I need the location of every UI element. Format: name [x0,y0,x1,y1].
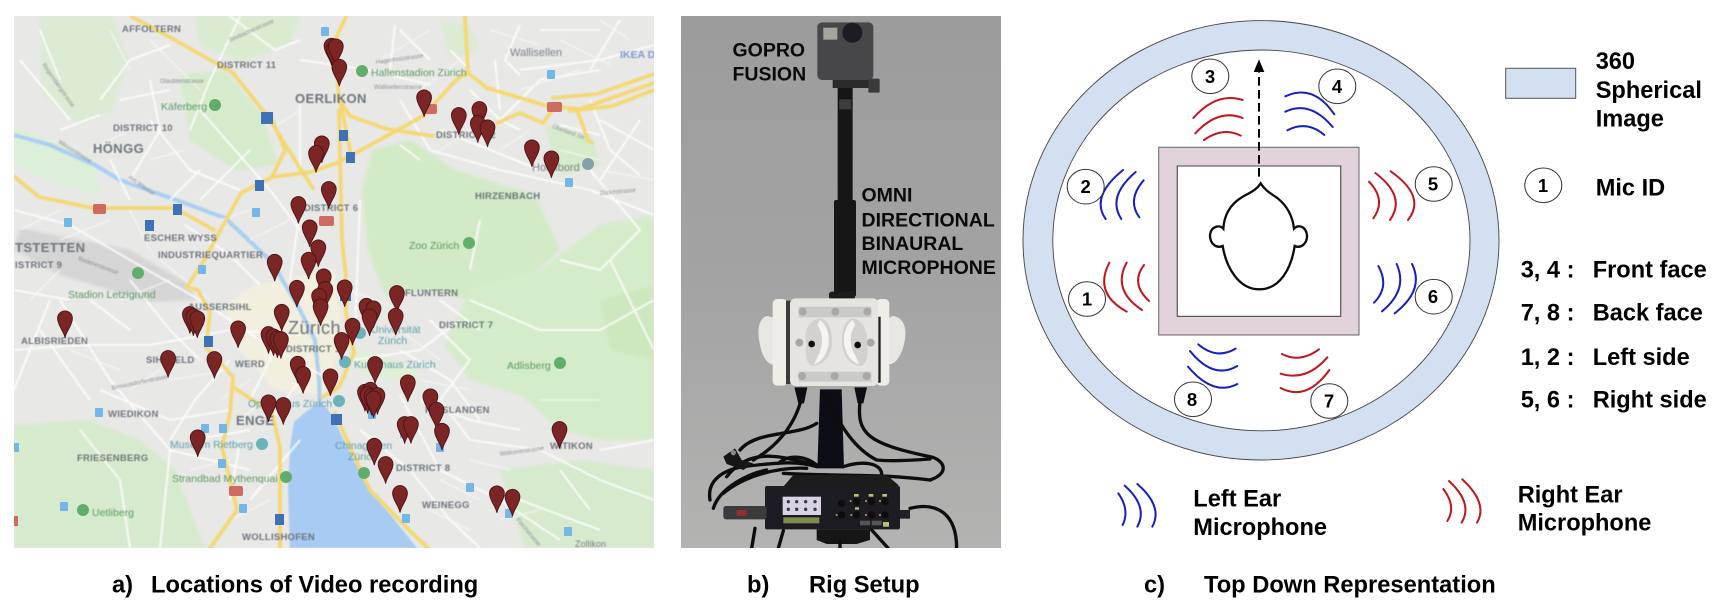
map place labels: Wallisellenstrasse [374,85,422,91]
legend: mic id: Mic ID [1596,176,1665,202]
map place labels: DISTRICT 11 [217,60,277,71]
panel: top down diagram [1023,21,1499,527]
map place labels: Seebacherstrasse [228,18,276,44]
map place labels: ALBISRIEDEN [21,336,88,347]
legend: mic id [1525,168,1665,203]
map place labels: Chinagarten [335,440,392,452]
legend: mic faces: Right side [1593,388,1707,414]
legend: mic faces: Left side [1593,345,1690,371]
legend: mic faces [1521,258,1707,414]
map place labels: ISTRICT 9 [15,260,62,271]
legend: left ear microphone: Microphone [1193,515,1327,541]
rig label: camera: FUSION [732,64,806,86]
legend: right ear microphone: Microphone [1518,511,1651,537]
mic id circles: 7 [1324,390,1334,412]
mic 8 left ear arcs [1188,344,1237,388]
mic arcs and arrow upper left [1101,59,1334,289]
caption b [747,572,920,598]
panel: map of video recording locations [14,16,692,549]
panel: rig photo [681,16,1001,548]
map place labels: Adlisberg [507,360,551,372]
map place labels: Zollikon [575,539,606,549]
mic 4 left ear arcs [1285,92,1334,135]
mic id circles [1067,59,1452,418]
legend: mic id: 1 [1538,175,1548,196]
caption b: b) [747,572,769,598]
map place labels: DISTRICT 12 [436,130,496,141]
legend: left ear microphone [1193,487,1327,541]
map place labels: Strandbad Mythenquai [172,473,278,485]
mic id circles: 8 [1187,389,1197,410]
rig label: microphone: BINAURAL [862,233,963,255]
legend: spherical image: 360 [1596,49,1635,75]
map place labels: Birmensdorferstrasse [111,374,169,392]
mic arcs lower left [1104,263,1329,527]
caption a: Locations of Video recording [151,572,478,598]
legend: mic faces: Back face [1593,301,1703,327]
rig label: microphone: MICROPHONE [862,257,996,279]
binaural microphone head [758,292,906,386]
map place labels: FRIESENBERG [77,453,148,464]
map place labels: FLUNTERN [405,288,458,299]
rig label: camera [732,40,806,86]
cables and stand [710,387,957,548]
map place labels: DISTRICT 1 [286,344,341,355]
map place labels: HIRZENBACH [475,191,540,202]
caption c: c) [1144,572,1165,598]
mic 7 right ear arcs [1281,349,1329,392]
map place labels: DISTRICT 7 [439,320,493,331]
map place labels: Zürich [378,335,407,347]
map place labels: OERLIKON [295,91,367,106]
map place labels: Zürichstrasse [600,188,637,197]
map place labels: WITIKON [550,441,593,452]
map place labels: Wallisellen [510,47,562,59]
map place labels: Zürich [288,318,341,338]
map place labels: HÖNGG [93,141,144,156]
mic id circles: 4 [1332,76,1343,97]
map place labels: Hochbord [532,162,580,174]
map place labels: Badenerstrasse [77,256,119,276]
map place labels: IKEA Dietlikon [620,49,692,61]
map place labels: WOLLISHOFEN [242,532,315,543]
map place labels: Witikonerstrasse [499,446,545,458]
legend: left ear microphone: Left Ear [1193,487,1281,513]
map place labels: WERD [235,359,265,370]
map place labels: Überland Str. [551,123,587,142]
map place labels: ENGE [236,413,274,428]
legend arcs: left ear [1118,484,1156,527]
legend: mic faces: 7, 8 : [1521,301,1574,327]
direction arrow [1254,59,1264,177]
mic 3 right ear arcs [1193,98,1243,140]
legend: right ear microphone [1443,479,1651,537]
map place labels: Käferberg [161,101,207,113]
map place labels: Glaubtenstrasse [160,79,204,85]
legend: mic faces: Front face [1593,258,1707,284]
map place labels: Hagenholzstrasse [375,53,424,66]
mic id circles: 1 [1082,288,1092,310]
map place labels: DISTRICT 8 [396,463,450,474]
map place labels: Regensbergstrasse [40,63,75,109]
legend: mic faces: 1, 2 : [1521,345,1574,371]
map place labels [15,18,692,549]
mic arcs right [1369,171,1416,313]
cube face frame [1159,147,1359,335]
map place labels: Hallenstadion Zürich [371,67,467,79]
map place labels: DISTRICT 6 [304,203,358,214]
caption a: a) [112,572,133,598]
road network [14,16,654,548]
legend: right ear microphone: Right Ear [1518,483,1623,509]
map place labels: WIEDIKON [108,409,159,420]
mic 5 right ear arcs [1369,171,1414,220]
map place labels: Forchstrasse [514,517,542,548]
map place labels: Am Wasser [127,175,156,197]
map place labels: SIHLFELD [146,355,194,366]
camera and pole [817,22,880,297]
map place labels: INDUSTRIEQUARTIER [158,250,263,261]
map place labels: DISTRICT 10 [113,123,173,134]
map place labels: Museum Rietberg [170,439,253,451]
map place labels: Winzerstrasse [57,140,93,165]
map place labels: AFFOLTERN [122,24,181,35]
map place labels: TSTETTEN [15,240,85,255]
map place labels: Opernhaus Zürich [248,398,332,410]
map place labels: AUSSERSIHL [188,302,252,313]
legend: spherical image [1506,49,1702,133]
spherical image ring [1023,21,1499,460]
mic id circles: 2 [1081,176,1091,197]
map place labels: Uetliberg [92,507,134,519]
map place labels: WEINEGG [422,500,470,511]
map place labels: Zürich [348,451,377,463]
map areas: parks and land use [14,16,654,548]
rig label: microphone: OMNI [862,184,912,206]
mic 1 right ear arcs [1104,263,1149,312]
caption b: Rig Setup [809,572,920,598]
map place labels: Zoo Zürich [409,240,459,252]
mic id circles: 3 [1205,66,1215,87]
rig label: camera: GOPRO [732,40,805,62]
rig label: microphone [862,184,996,279]
mic id circles: 5 [1428,174,1438,194]
road shields and transit icons [14,27,594,536]
location pins [58,38,567,516]
lake and river [14,135,417,548]
map place labels: ESCHER WYSS [144,233,217,244]
map place labels: Universität [371,324,421,336]
mic id circles: 6 [1428,286,1438,307]
map place labels: Stadion Letzigrund [68,289,156,301]
caption c: Top Down Representation [1204,572,1496,598]
mic 6 left ear arcs [1374,264,1416,313]
rig label: microphone: DIRECTIONAL [862,210,995,232]
mic 2 left ear arcs [1101,170,1144,219]
legend: mic faces: 3, 4 : [1521,258,1574,284]
legend: spherical image: Spherical [1596,78,1702,104]
listener head [1210,183,1307,289]
legend: spherical image: Image [1596,107,1664,133]
inner square [1177,166,1341,316]
audio recorder [723,475,910,548]
map place labels: Kunsthaus Zürich [354,359,436,371]
map place labels: HIRSLANDEN [425,405,490,416]
legend: mic faces: 5, 6 : [1521,388,1574,414]
